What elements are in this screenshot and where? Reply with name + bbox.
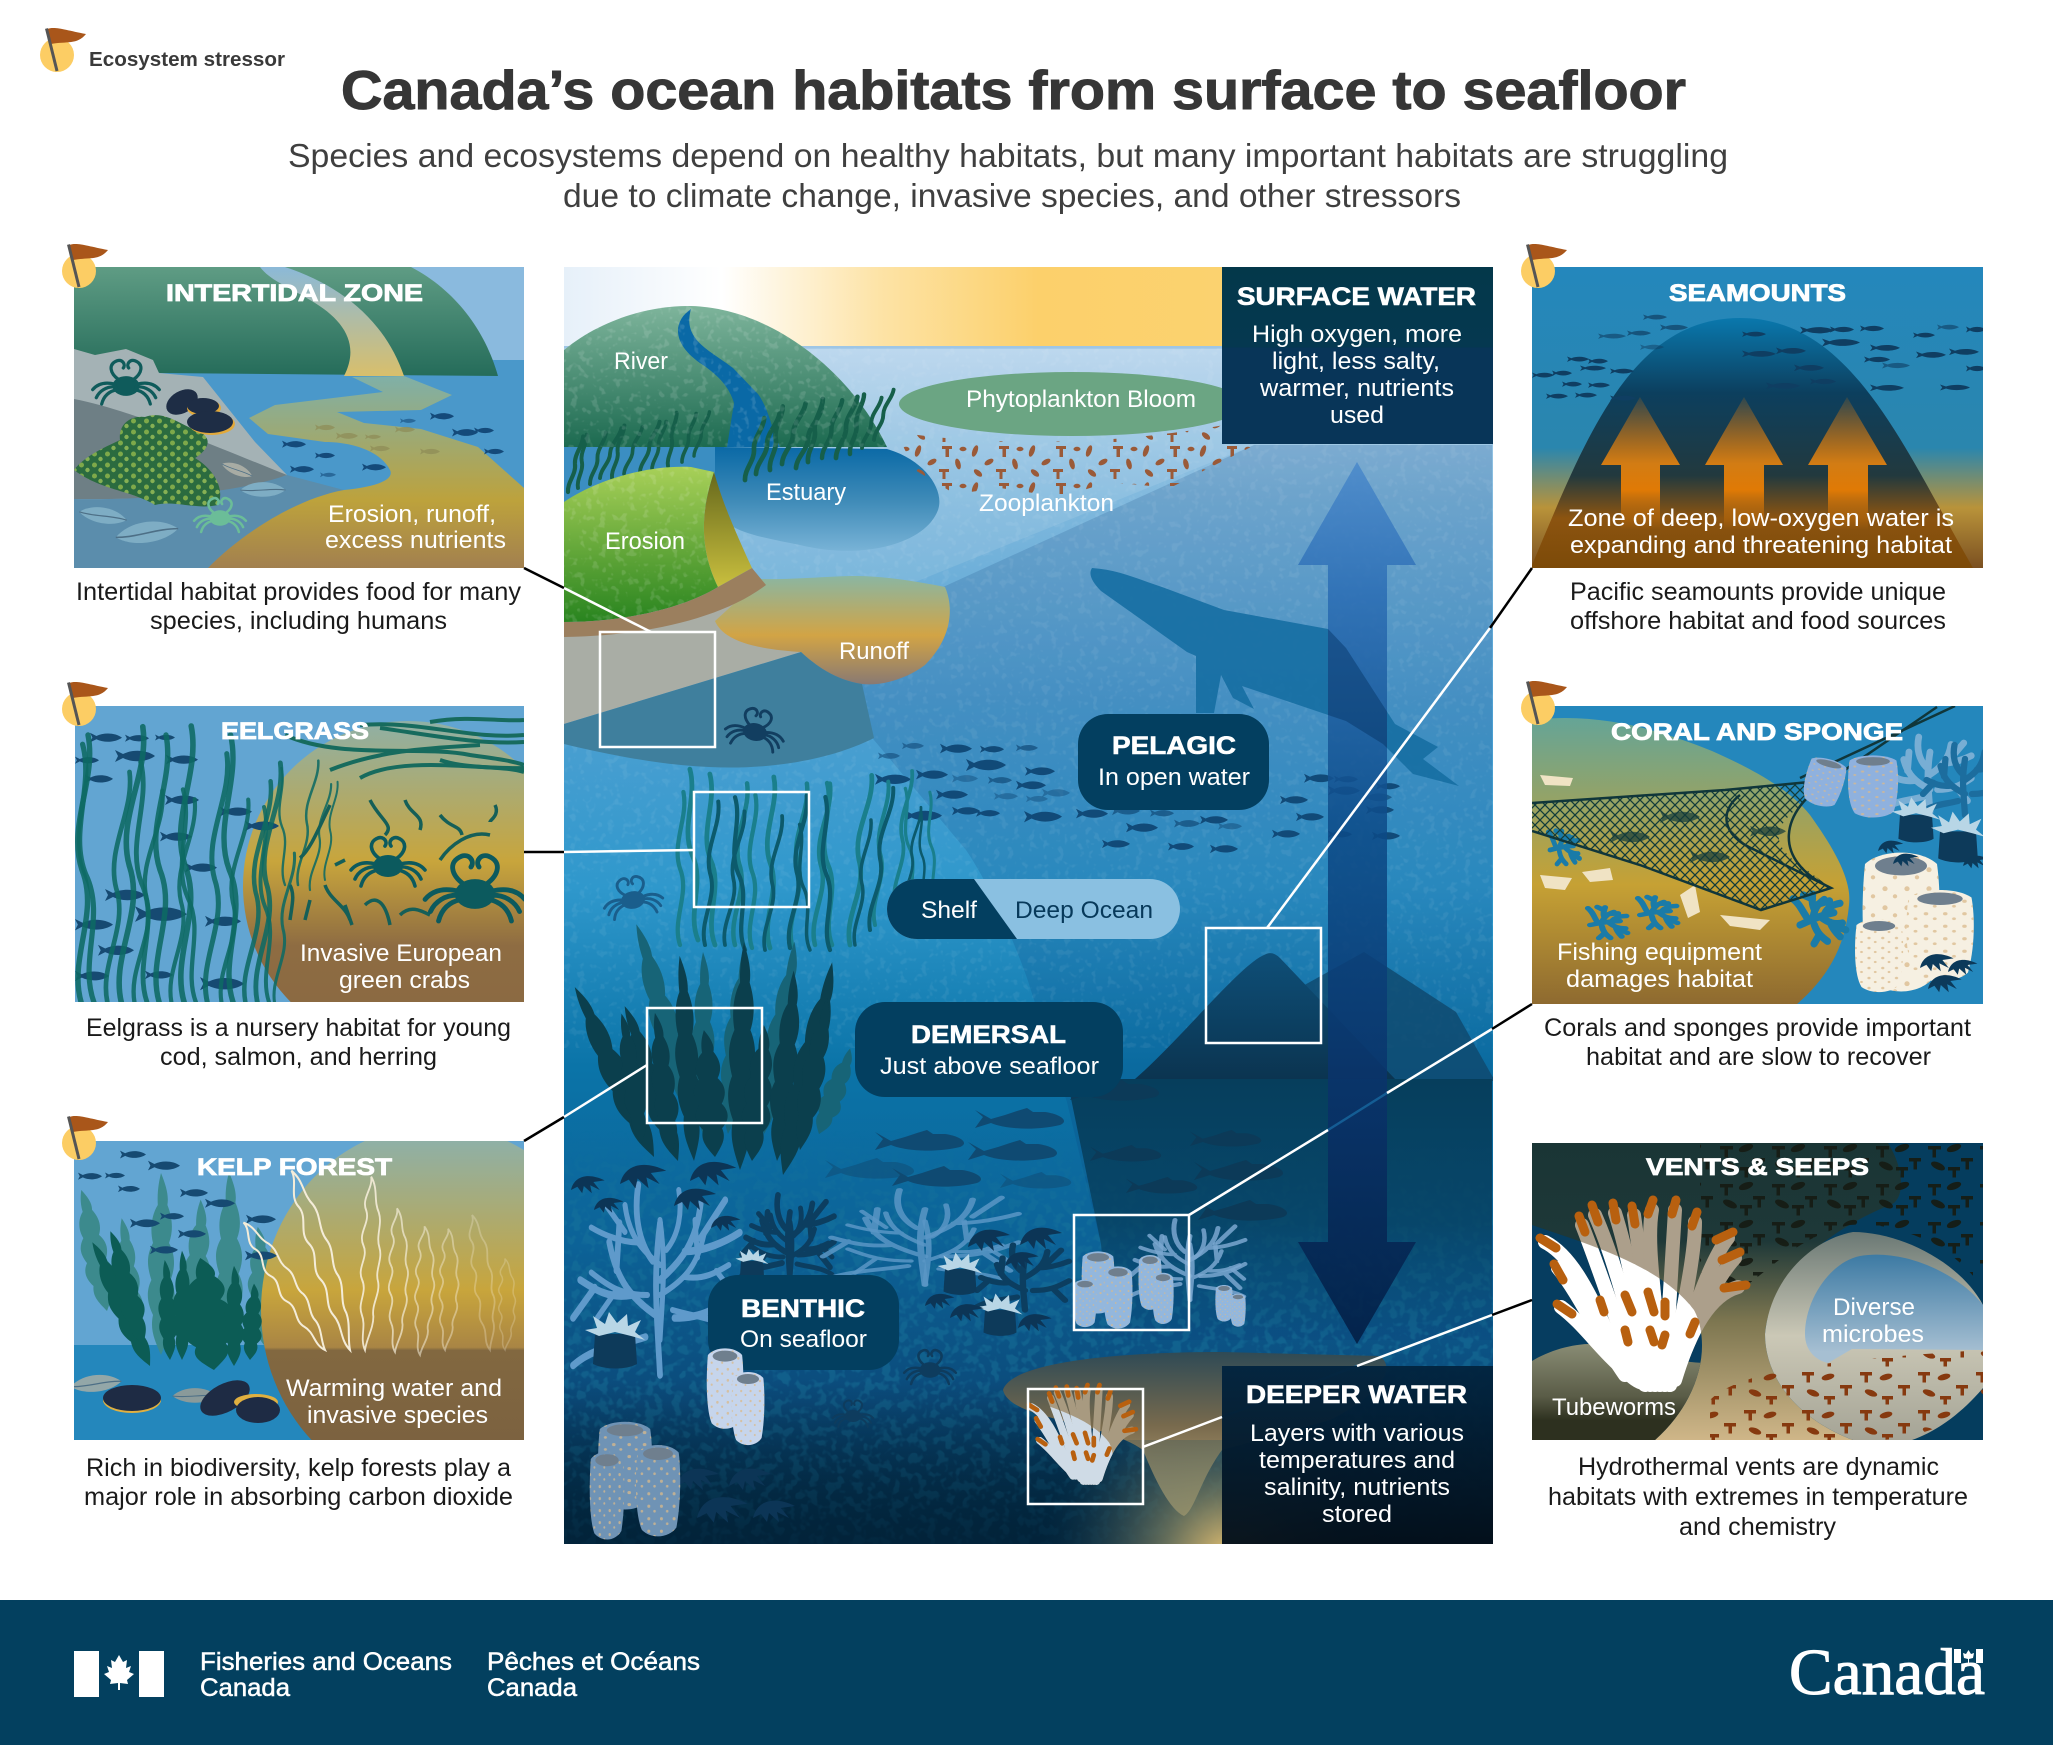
panel: vents and seeps: and chemistry: [1679, 1513, 1836, 1541]
label: surface water box: warmer, nutrients: [1259, 375, 1454, 402]
sponges: [590, 1251, 1246, 1540]
pill: demersal: DEMERSAL: [911, 1021, 1066, 1049]
zooplankton: [904, 426, 1250, 494]
pill: pelagic: [1078, 714, 1269, 810]
label: deeper water box: stored: [1322, 1501, 1392, 1528]
footer: Fisheries and Oceans: [200, 1648, 452, 1676]
panel: eelgrass: Invasive European: [300, 940, 502, 967]
panel: eelgrass: [62, 682, 573, 1071]
label: deeper water box: DEEPER WATER: [1246, 1381, 1467, 1409]
panel: intertidal zone: Intertidal habitat provides food for many: [76, 578, 522, 606]
label: deeper water box: temperatures and: [1259, 1447, 1455, 1474]
footer: Canada: [487, 1674, 577, 1702]
panel: coral and sponge: damages habitat: [1566, 966, 1753, 993]
panel: seamounts: offshore habitat and food sources: [1570, 607, 1946, 635]
panel: eelgrass: Eelgrass is a nursery habitat for young: [86, 1014, 511, 1042]
panel: seamounts: expanding and threatening habitat: [1570, 532, 1952, 559]
label: surface water box: High oxygen, more: [1252, 321, 1462, 348]
eelgrass bed: [678, 769, 938, 950]
pill: pelagic: In open water: [1098, 764, 1250, 791]
panel: kelp forest: Rich in biodiversity, kelp forests play a: [86, 1454, 511, 1482]
title: Canada’s ocean habitats from surface to seafloor: [341, 59, 1686, 121]
kelp forest: [563, 921, 861, 1178]
label: surface water box: light, less salty,: [1272, 348, 1440, 375]
label: surface water box: SURFACE WATER: [1237, 283, 1476, 311]
panel: vents and seeps: [1532, 1143, 1983, 1541]
panel: vents and seeps: Tubeworms: [1552, 1394, 1676, 1421]
panel: eelgrass: cod, salmon, and herring: [160, 1043, 437, 1071]
panel: intertidal zone: INTERTIDAL ZONE: [166, 280, 423, 307]
place labels: Runoff: [839, 638, 909, 665]
footer: Pêches et Océans: [487, 1648, 700, 1676]
place labels: River: [614, 348, 668, 375]
coral: [573, 1185, 1245, 1375]
pill: shelf and deep ocean: Deep Ocean: [1015, 897, 1153, 924]
panel: coral and sponge: [1521, 681, 2004, 1071]
place labels: [605, 348, 1196, 665]
panel: intertidal zone: species, including humans: [150, 607, 447, 635]
legend: ecosystem stressor: [40, 28, 285, 72]
subtitle: due to climate change, invasive species, and other stressors: [563, 178, 1461, 215]
panel: seamounts: SEAMOUNTS: [1669, 280, 1846, 307]
panel: intertidal zone: [62, 244, 524, 635]
pill: shelf and deep ocean: Shelf: [921, 897, 977, 924]
whale: [1090, 568, 1459, 786]
faint connector behind arrow and deeper-water box: [1222, 1093, 1387, 1417]
pill: pelagic: PELAGIC: [1112, 732, 1236, 760]
tubeworms in mound: [1029, 1385, 1136, 1481]
place labels: Estuary: [766, 479, 846, 506]
panel: seamounts: Pacific seamounts provide unique: [1570, 578, 1946, 606]
label: deeper water box: [1222, 1366, 1493, 1544]
pill: shelf and deep ocean: [887, 879, 1180, 939]
panel: kelp forest: Warming water and: [286, 1375, 502, 1402]
legend: ecosystem stressor: Ecosystem stressor: [89, 49, 285, 71]
label: deeper water box: salinity, nutrients: [1264, 1474, 1450, 1501]
Canada wordmark: Canada: [1789, 1636, 1985, 1709]
panel: seamounts: Zone of deep, low-oxygen water is: [1568, 505, 1954, 532]
footer: Canada: [200, 1674, 290, 1702]
pill: benthic: [708, 1275, 899, 1370]
panel: intertidal zone: excess nutrients: [325, 527, 506, 554]
whale seen through arrow: [1328, 629, 1387, 748]
subtitle: Species and ecosystems depend on healthy habitats, but many important habitats are struggling: [288, 138, 1728, 175]
place labels: Phytoplankton Bloom: [966, 386, 1196, 413]
sponge on benthic pill: [707, 1348, 764, 1445]
label: surface water box: [1222, 267, 1493, 444]
fish school: [875, 743, 1400, 853]
panel: vents and seeps: microbes: [1822, 1321, 1924, 1348]
panel: coral and sponge: Corals and sponges provide important: [1544, 1014, 1971, 1042]
panel: eelgrass: green crabs: [339, 967, 470, 994]
panel: vents and seeps: VENTS & SEEPS: [1646, 1154, 1869, 1181]
central ocean cross-section: [563, 267, 1495, 1544]
government of Canada flag signature: [74, 1651, 164, 1697]
phytoplankton bloom: [899, 372, 1245, 436]
panel: coral and sponge: Fishing equipment: [1557, 939, 1762, 966]
coastal land, river and estuary: [564, 300, 950, 768]
panel: vents and seeps: habitats with extremes in temperature: [1548, 1483, 1968, 1511]
crabs on shelf: [600, 704, 956, 1427]
pill: benthic: On seafloor: [740, 1326, 867, 1353]
big double arrow: [1298, 462, 1416, 1344]
panel: vents and seeps: Diverse: [1833, 1294, 1915, 1321]
place labels: Zooplankton: [979, 490, 1114, 517]
panel: eelgrass: EELGRASS: [221, 718, 369, 745]
panel: kelp forest: major role in absorbing carbon dioxide: [84, 1483, 513, 1511]
pill: benthic: BENTHIC: [741, 1295, 865, 1323]
pill: demersal: [855, 1002, 1123, 1097]
panel: coral and sponge: CORAL AND SPONGE: [1611, 719, 1903, 746]
seamounts: [1135, 952, 1495, 1081]
label: deeper water box: Layers with various: [1250, 1420, 1464, 1447]
anemones: [585, 1249, 1022, 1368]
footer: [0, 1600, 2053, 1745]
demersal fish: [825, 1098, 1287, 1220]
panel: kelp forest: [62, 1116, 524, 1510]
panel: vents and seeps: Hydrothermal vents are dynamic: [1578, 1453, 1939, 1481]
panel: seamounts: [1521, 244, 1986, 635]
hydrothermal vent mound: [1003, 1352, 1386, 1544]
place labels: Erosion: [605, 528, 685, 555]
connector lines and inset boxes: [524, 568, 1532, 1504]
panel: coral and sponge: habitat and are slow to recover: [1586, 1043, 1931, 1071]
panel: kelp forest: KELP FOREST: [197, 1154, 392, 1181]
subtitle: [288, 138, 1728, 215]
label: surface water box: used: [1330, 402, 1384, 429]
pill: demersal: Just above seafloor: [880, 1053, 1099, 1080]
panel: kelp forest: invasive species: [307, 1402, 488, 1429]
panel: intertidal zone: Erosion, runoff,: [328, 501, 496, 528]
shrimp: [571, 1162, 1062, 1523]
